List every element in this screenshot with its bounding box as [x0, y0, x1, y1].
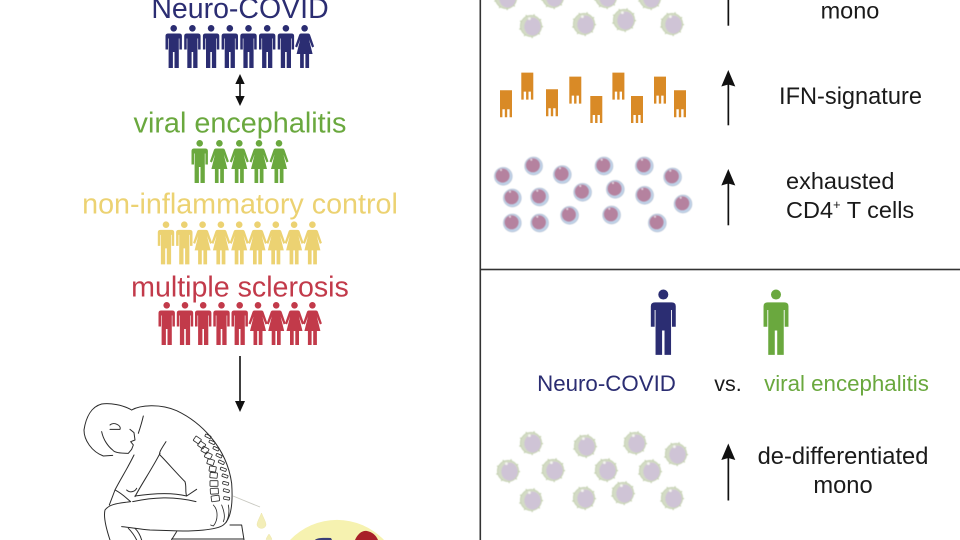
heading: viral encephalitis: viral encephalitis — [134, 108, 346, 140]
panel: top right comparison — [494, 0, 922, 232]
label: exhausted CD4+ T cells: + — [833, 197, 841, 212]
label: vs.: vs. — [714, 372, 742, 396]
label: de-differentiated mono: mono — [813, 473, 873, 499]
icon group: Neuro-COVID patients — [166, 25, 314, 68]
label: viral encephalitis: viral encephalitis — [764, 371, 929, 396]
icon group: viral encephalitis patients — [192, 140, 288, 183]
label: Neuro-COVID: Neuro-COVID — [537, 371, 676, 396]
panel dividers — [480, 0, 960, 540]
arrow: up IFN — [721, 70, 735, 125]
cells: IFN signature — [500, 73, 686, 123]
label: IFN-signature: IFN-signature — [779, 84, 922, 110]
icon: CSF drops — [257, 513, 272, 540]
heading: multiple sclerosis: multiple sclerosis — [131, 272, 349, 304]
illustration: patient seated for lumbar puncture — [84, 404, 244, 540]
arrow: double headed comparison — [235, 74, 245, 106]
arrow: down to lumbar puncture — [235, 356, 245, 412]
label: exhausted CD4+ T cells — [786, 168, 914, 223]
arrow: up de-differentiated — [721, 444, 735, 500]
needle line — [233, 496, 260, 507]
arrow: up monocytes — [728, 0, 729, 26]
circle: cerebrospinal fluid sample — [290, 520, 384, 540]
arrow: up T cells — [721, 169, 735, 225]
cells: exhausted CD4 T cells — [494, 157, 692, 232]
label: de-differentiated mono — [758, 444, 928, 499]
icon: Neuro-COVID person — [651, 290, 676, 355]
label: exhausted CD4+ T cells: CD4 — [786, 197, 833, 223]
icon group: control patients — [158, 221, 322, 264]
icon: viral encephalitis person — [764, 290, 788, 355]
icon group: multiple sclerosis patients — [158, 302, 322, 345]
label: exhausted CD4+ T cells: exhausted — [786, 168, 894, 194]
label: exhausted CD4+ T cells: T cells — [841, 197, 914, 223]
label: de-differentiated mono: de-differentiated — [758, 444, 928, 470]
panel: bottom right comparison — [497, 290, 929, 511]
panel: cohorts — [82, 0, 398, 412]
heading: non-inflammatory control: non-inflammatory control — [82, 188, 398, 220]
cells: de-differentiated monocytes — [497, 432, 687, 511]
cells: monocytes — [495, 0, 683, 37]
